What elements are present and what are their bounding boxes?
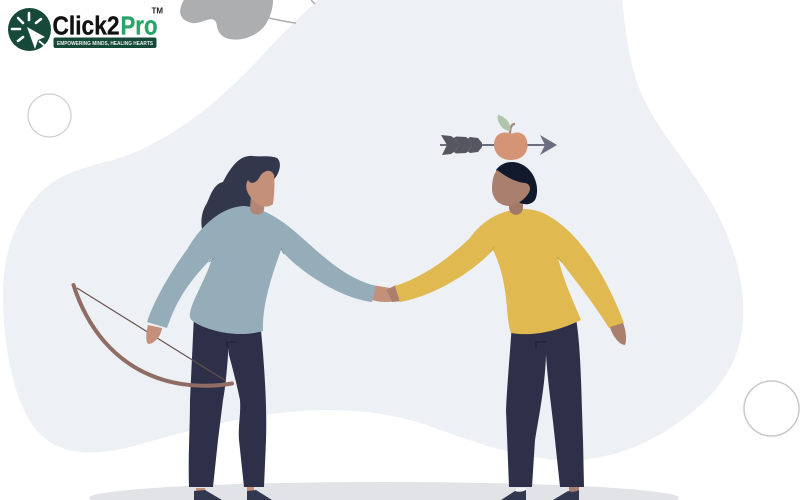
man right leg bbox=[546, 318, 584, 487]
woman neck bbox=[250, 195, 265, 215]
apple body bbox=[494, 132, 528, 160]
man hair bbox=[496, 162, 537, 204]
decorative circle right bbox=[744, 381, 799, 436]
man pocket mark bbox=[536, 342, 546, 348]
man neck bbox=[509, 195, 523, 215]
arrow fletching bbox=[441, 135, 482, 155]
woman hair bbox=[201, 156, 280, 240]
bow and string bbox=[74, 285, 232, 386]
arrow through apple bbox=[440, 135, 557, 155]
arrow head bbox=[540, 135, 557, 155]
man left shoe bbox=[501, 488, 526, 500]
logo wordmark: Click2 bbox=[52, 12, 120, 40]
logo badge icon bbox=[8, 8, 51, 51]
man left leg bbox=[506, 322, 550, 487]
logo tagline bar: EMPOWERING MINDS, HEALING HEARTS bbox=[57, 41, 154, 47]
woman face bbox=[246, 171, 274, 207]
logo tagline bar bbox=[54, 38, 156, 48]
woman sweater armpit marks bbox=[209, 248, 284, 262]
woman pocket mark bbox=[227, 342, 236, 348]
grey plant at top bbox=[180, 0, 315, 40]
apple bbox=[494, 115, 528, 160]
woman on left bbox=[74, 156, 376, 500]
decorative circle left bbox=[28, 94, 71, 137]
handshake bbox=[372, 285, 402, 302]
woman sweater and sleeves bbox=[147, 206, 376, 334]
apple leaf bbox=[498, 115, 510, 131]
trademark: TM bbox=[152, 6, 163, 16]
woman right shoe bbox=[247, 487, 272, 500]
man face bbox=[492, 170, 530, 206]
logo bbox=[8, 6, 163, 51]
logo wordmark pro: Pro bbox=[120, 12, 158, 40]
man on right bbox=[395, 162, 626, 500]
woman right leg bbox=[228, 320, 266, 487]
man sweater and sleeves bbox=[395, 209, 624, 334]
man sweater armpit marks bbox=[490, 247, 562, 262]
woman left shoe bbox=[194, 488, 222, 500]
apple stem bbox=[510, 124, 514, 133]
woman hand bbox=[146, 325, 162, 344]
man right shoe bbox=[553, 487, 579, 500]
woman left leg bbox=[189, 315, 232, 487]
arrow shaft bbox=[440, 144, 548, 146]
man hand bbox=[610, 323, 626, 345]
ground shadow bbox=[89, 482, 679, 500]
